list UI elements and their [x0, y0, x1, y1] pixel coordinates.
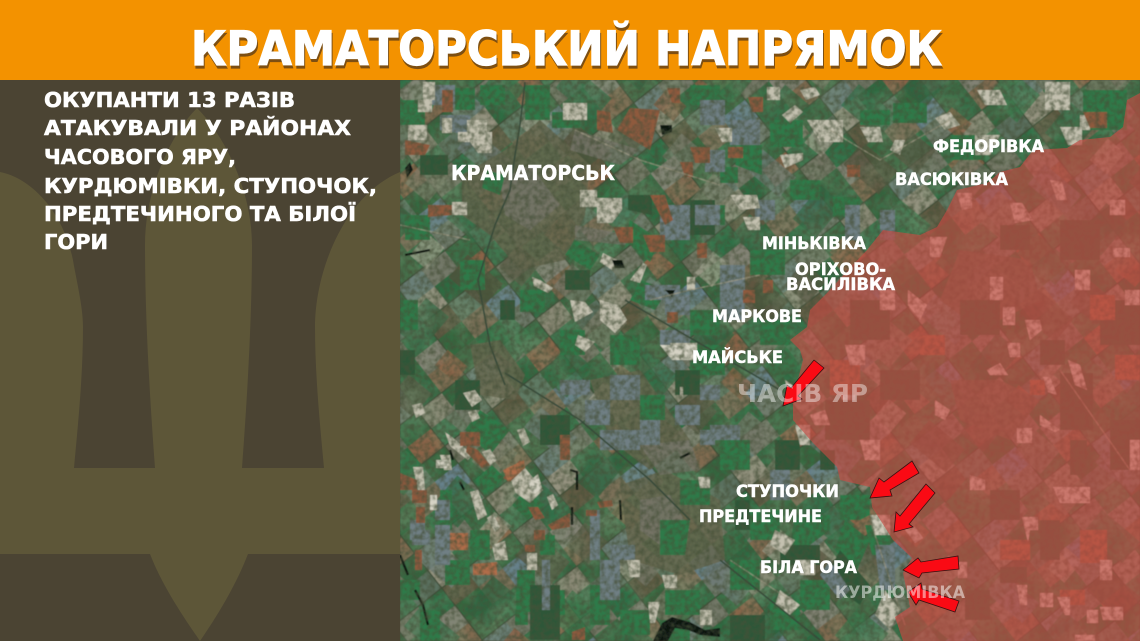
label: Kramatorsk: КРАМАТОРСЬК [451, 161, 615, 185]
left panel text [44, 88, 377, 254]
trident emblem [0, 108, 400, 641]
label: Vasiukivka: ВАСЮКІВКА [895, 170, 1008, 189]
arrow: Kurdiumivka [908, 583, 959, 612]
label: Kurdiumivka: КУРДЮМІВКА [835, 583, 965, 602]
arrow: Chasiv Yar [783, 360, 824, 406]
label: Markove: МАРКОВЕ [712, 307, 802, 326]
label: Fedorivka: ФЕДОРІВКА [933, 137, 1044, 156]
left panel text: ЧАСОВОГО ЯРУ, [44, 145, 236, 169]
arrow: Bila Hora [903, 556, 959, 578]
label: Stupochky: СТУПОЧКИ [736, 482, 839, 501]
grey-blue fields [410, 85, 895, 610]
arrow: Stupochky north [870, 461, 919, 498]
green fields [400, 85, 1127, 641]
brown fields [400, 88, 1107, 640]
occupied territory overlay [790, 93, 1140, 641]
left panel [0, 80, 400, 641]
title bar: КРАМАТОРСЬКИЙ НАПРЯМОК [192, 25, 943, 80]
label: Vasylivka: ВАСИЛІВКА [786, 275, 895, 294]
label: Bila Hora: БІЛА ГОРА [760, 558, 857, 577]
satellite map [400, 80, 1140, 641]
urban areas [462, 120, 1040, 575]
label: Orikhovo: ОРІХОВО- [795, 260, 886, 279]
left panel text: ПРЕДТЕЧИНОГО ТА БІЛОЇ [44, 201, 356, 226]
rivers and roads [478, 82, 820, 640]
label: Chasiv Yar: ЧАСІВ ЯР [737, 379, 868, 408]
label: Maiske: МАЙСЬКЕ [692, 348, 783, 367]
title bar [0, 0, 1140, 80]
arrow: Stupochky south [894, 484, 935, 532]
left panel text: АТАКУВАЛИ У РАЙОНАХ [44, 115, 351, 140]
map labels [451, 137, 1044, 602]
left panel text: ОКУПАНТИ 13 РАЗІВ [44, 88, 295, 112]
attack arrows [783, 360, 959, 612]
left panel text: ГОРИ [44, 230, 108, 254]
title: КРАМАТОРСЬКИЙ НАПРЯМОК [191, 22, 942, 77]
lake and ponds [405, 125, 720, 641]
white and pale fields [408, 82, 1090, 630]
left panel text: КУРДЮМІВКИ, СТУПОЧОК, [44, 174, 377, 198]
label: Minkivka: МІНЬКІВКА [762, 234, 866, 253]
label: Predtechyne: ПРЕДТЕЧИНЕ [699, 507, 822, 526]
fields under the red area [825, 220, 1140, 620]
